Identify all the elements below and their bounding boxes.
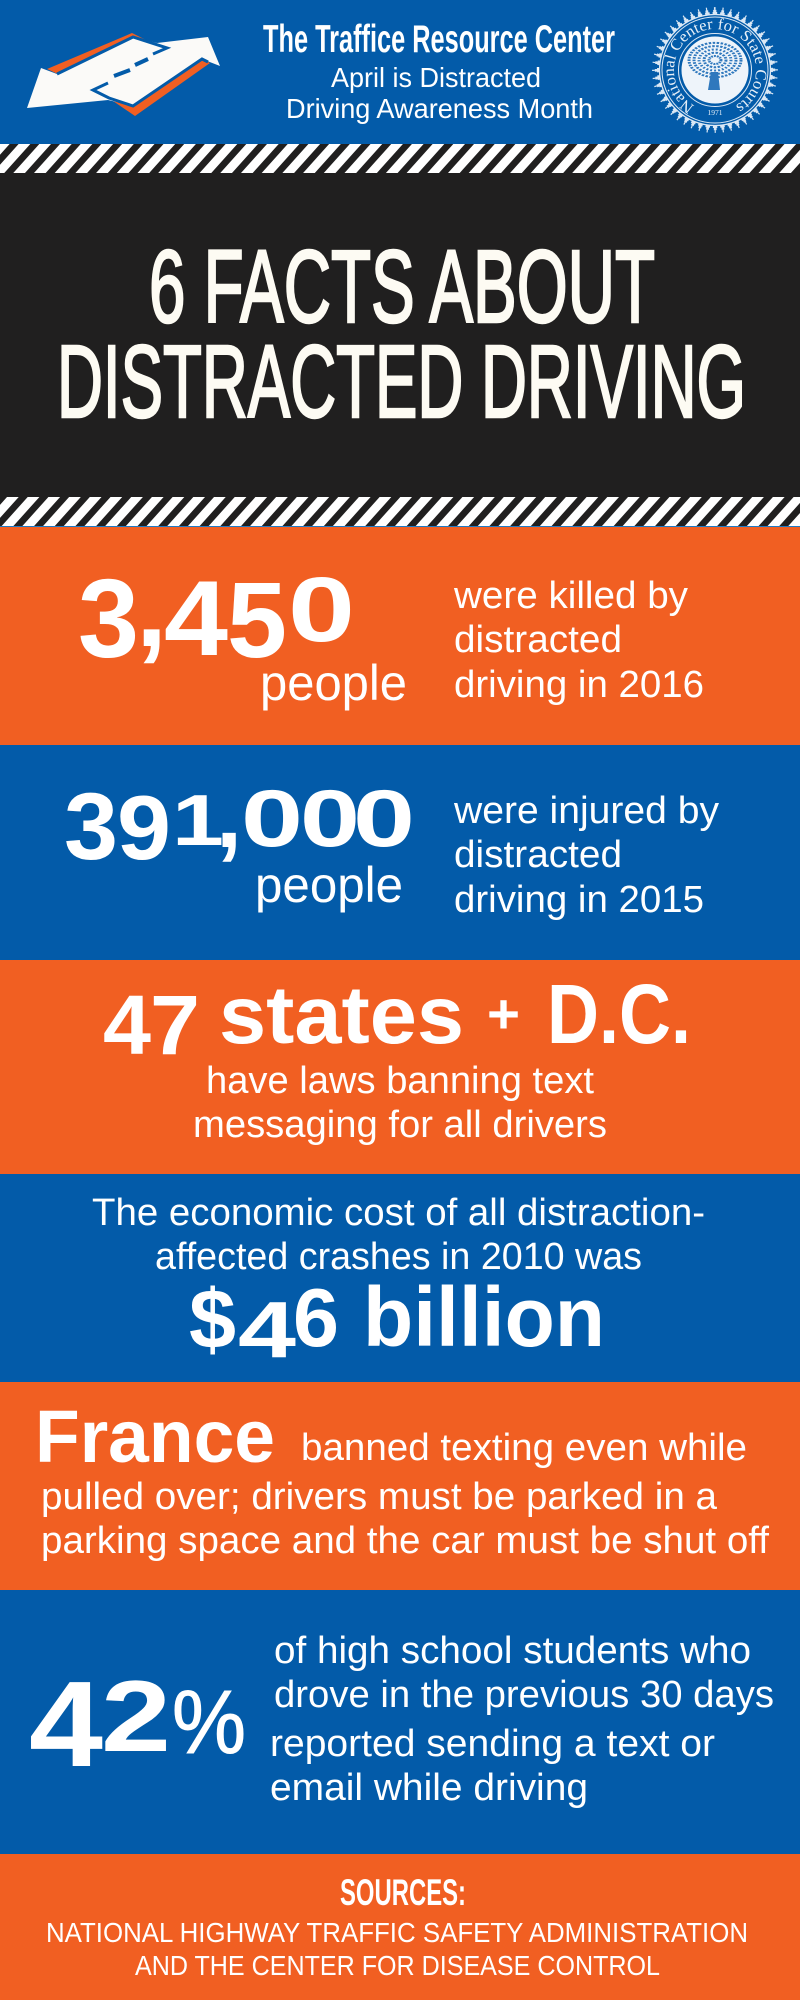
panel: fact 2 injured	[0, 745, 800, 960]
big number: 391,000: 3	[64, 774, 118, 880]
text: killed description: distracted	[454, 619, 622, 661]
text: students description: drove in the previous 30 days	[274, 1674, 774, 1716]
text: source list: AND THE CENTER FOR DISEASE CONTROL	[135, 1950, 660, 1981]
big number: 3,450: 4	[164, 558, 228, 678]
text: students description	[270, 1630, 774, 1809]
text: awareness month	[286, 62, 593, 124]
panel: sources	[0, 1854, 800, 2000]
label: people: people	[255, 857, 403, 913]
big number: 391,000	[64, 762, 415, 880]
text: cost description: The economic cost of all distraction-	[92, 1192, 705, 1234]
big number: 391,000: 9	[117, 778, 171, 879]
text: laws description: messaging for all drivers	[193, 1104, 607, 1146]
big number: 42%: %	[172, 1673, 246, 1773]
icon: National Center for State Courts seal: 1971	[708, 108, 723, 117]
text: killed description: were killed by	[453, 575, 688, 617]
big number: 391,000: 0	[353, 774, 415, 864]
text: cost description	[92, 1192, 705, 1278]
panel: header	[27, 7, 778, 133]
text: students description: of high school students who	[274, 1630, 751, 1672]
big number: 42%	[29, 1656, 246, 1792]
big text: $46 billion: $	[189, 1272, 236, 1366]
text: killed description	[453, 575, 704, 706]
panel: fact 4 economic cost	[0, 1174, 800, 1382]
panel: fact 1 killed	[0, 526, 800, 745]
text: source list	[46, 1917, 748, 1981]
panel: fact 6 high school students	[0, 1590, 800, 1854]
text: France description	[41, 1427, 769, 1562]
big text: 47 states + D.C.: 7	[150, 978, 200, 1072]
big number: 3,450: 5	[227, 559, 287, 680]
text: cost description: affected crashes in 2010 was	[155, 1236, 642, 1278]
big text: $46 billion	[189, 1270, 605, 1374]
text: killed description: driving in 2016	[454, 664, 704, 706]
big number: 391,000: ,	[216, 762, 242, 868]
big text: 47 states + D.C.: 4	[103, 978, 151, 1072]
text: injured description	[453, 790, 719, 921]
title	[57, 229, 746, 439]
big text: 47 states + D.C.	[103, 967, 691, 1072]
panel: fact 3 state laws	[0, 960, 800, 1174]
text: students description: reported sending a text or	[270, 1723, 715, 1765]
big text: $46 billion: 4	[238, 1285, 297, 1374]
big number: 3,450: ,	[136, 546, 167, 670]
text: injured description: driving in 2015	[454, 879, 704, 921]
big text: 47 states + D.C.: +	[487, 982, 520, 1045]
big number: 391,000: 0	[300, 774, 360, 864]
big number: 3,450	[78, 546, 355, 681]
text: students description: email while driving	[270, 1767, 588, 1809]
heading: sources: SOURCES:	[340, 1872, 466, 1913]
big text: $46 billion: billion	[363, 1270, 605, 1364]
big number: 391,000: 1	[172, 781, 224, 861]
text: France description: pulled over; drivers must be parked in a	[41, 1476, 718, 1518]
heading: organisation name: The Traffice Resource Center	[263, 18, 615, 61]
text: awareness month: April is Distracted	[331, 62, 541, 93]
big text: 47 states + D.C.: D.C.	[547, 967, 691, 1061]
label: people: people	[260, 655, 407, 711]
big text: $46 billion: 6	[293, 1271, 339, 1364]
big number: 3,450: 3	[78, 557, 139, 681]
icon: National Center for State Courts seal	[652, 7, 778, 133]
big number: 391,000: 0	[241, 774, 303, 864]
big number: 42%: 4	[29, 1656, 103, 1792]
text: awareness month: Driving Awareness Month	[286, 93, 593, 124]
text: injured description: distracted	[454, 834, 622, 876]
panel: title block	[0, 144, 800, 526]
icon: road arrows logo	[27, 33, 220, 116]
text: laws description	[193, 1060, 607, 1146]
big text: 47 states + D.C.: states	[219, 970, 464, 1061]
icon: National Center for State Courts seal: National Center for State Courts	[664, 18, 766, 114]
text: laws description: have laws banning text	[206, 1060, 594, 1102]
text: France description: parking space and the car must be shut off	[41, 1520, 769, 1562]
big text: France: France	[35, 1395, 275, 1478]
big number: 3,450: 0	[288, 559, 355, 661]
text: France description: banned texting even while	[301, 1427, 747, 1469]
text: source list: NATIONAL HIGHWAY TRAFFIC SAFETY ADMINISTRATION	[46, 1917, 748, 1948]
text: injured description: were injured by	[453, 790, 719, 832]
big number: 42%: 2	[101, 1661, 171, 1773]
panel: fact 5 France	[0, 1382, 800, 1590]
